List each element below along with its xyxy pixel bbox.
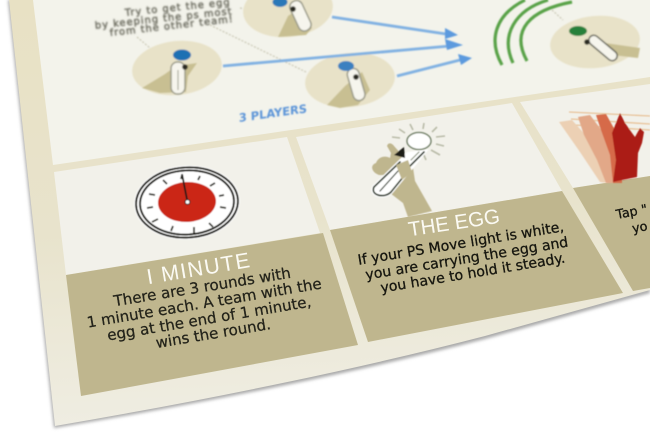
diagram artwork	[94, 0, 642, 125]
tan text area	[330, 191, 623, 342]
target player circle	[548, 11, 642, 73]
tan text area	[573, 176, 650, 291]
card background	[296, 103, 562, 230]
body text	[86, 264, 323, 352]
body text: yo	[631, 219, 649, 237]
instruction text: by keeping the ps most	[94, 6, 233, 32]
body text	[357, 219, 569, 297]
icon: moving hands	[559, 112, 650, 183]
dotted leader lines	[137, 8, 563, 72]
player 3 circle	[302, 48, 398, 112]
player 2 circle	[240, 0, 336, 42]
body text: wins the round.	[154, 315, 272, 352]
card background	[54, 137, 320, 275]
body text: you are carrying the egg and	[364, 235, 569, 284]
panel: the egg	[296, 103, 623, 342]
player 1 circle	[129, 36, 225, 100]
body text	[614, 202, 649, 237]
heading: the egg: THE EGG	[407, 205, 501, 241]
instruction text: from the other team!	[109, 14, 234, 39]
light rays	[392, 123, 445, 160]
instruction text	[94, 0, 234, 39]
body text: 1 minute each. A team with the	[86, 275, 323, 332]
button shadow	[394, 147, 405, 158]
panel: 1 minute	[54, 137, 358, 396]
panel: tap	[520, 84, 650, 291]
3 players label: 3 PLAYERS	[239, 101, 307, 125]
body text: If your PS Move light is white,	[357, 219, 565, 269]
body text: egg at the end of 1 minute,	[106, 293, 312, 344]
icon: hand holding glowing controller	[372, 123, 445, 217]
heading: 1 minute: I MINUTE	[145, 248, 253, 289]
body text: There are 3 rounds with	[111, 264, 292, 310]
fingers over wand	[396, 160, 412, 180]
arm and hand	[372, 143, 432, 217]
card background	[520, 84, 650, 188]
controller wand	[373, 152, 424, 196]
tan text area	[66, 233, 358, 396]
glowing bulb	[407, 132, 431, 150]
body text: you have to hold it steady.	[379, 251, 566, 297]
green signal arcs	[495, 0, 572, 65]
panel: players diagram	[33, 0, 650, 165]
diagram background	[33, 0, 650, 165]
arrows	[223, 17, 472, 76]
body text: Tap "	[614, 202, 649, 223]
icon: timer	[132, 163, 242, 242]
